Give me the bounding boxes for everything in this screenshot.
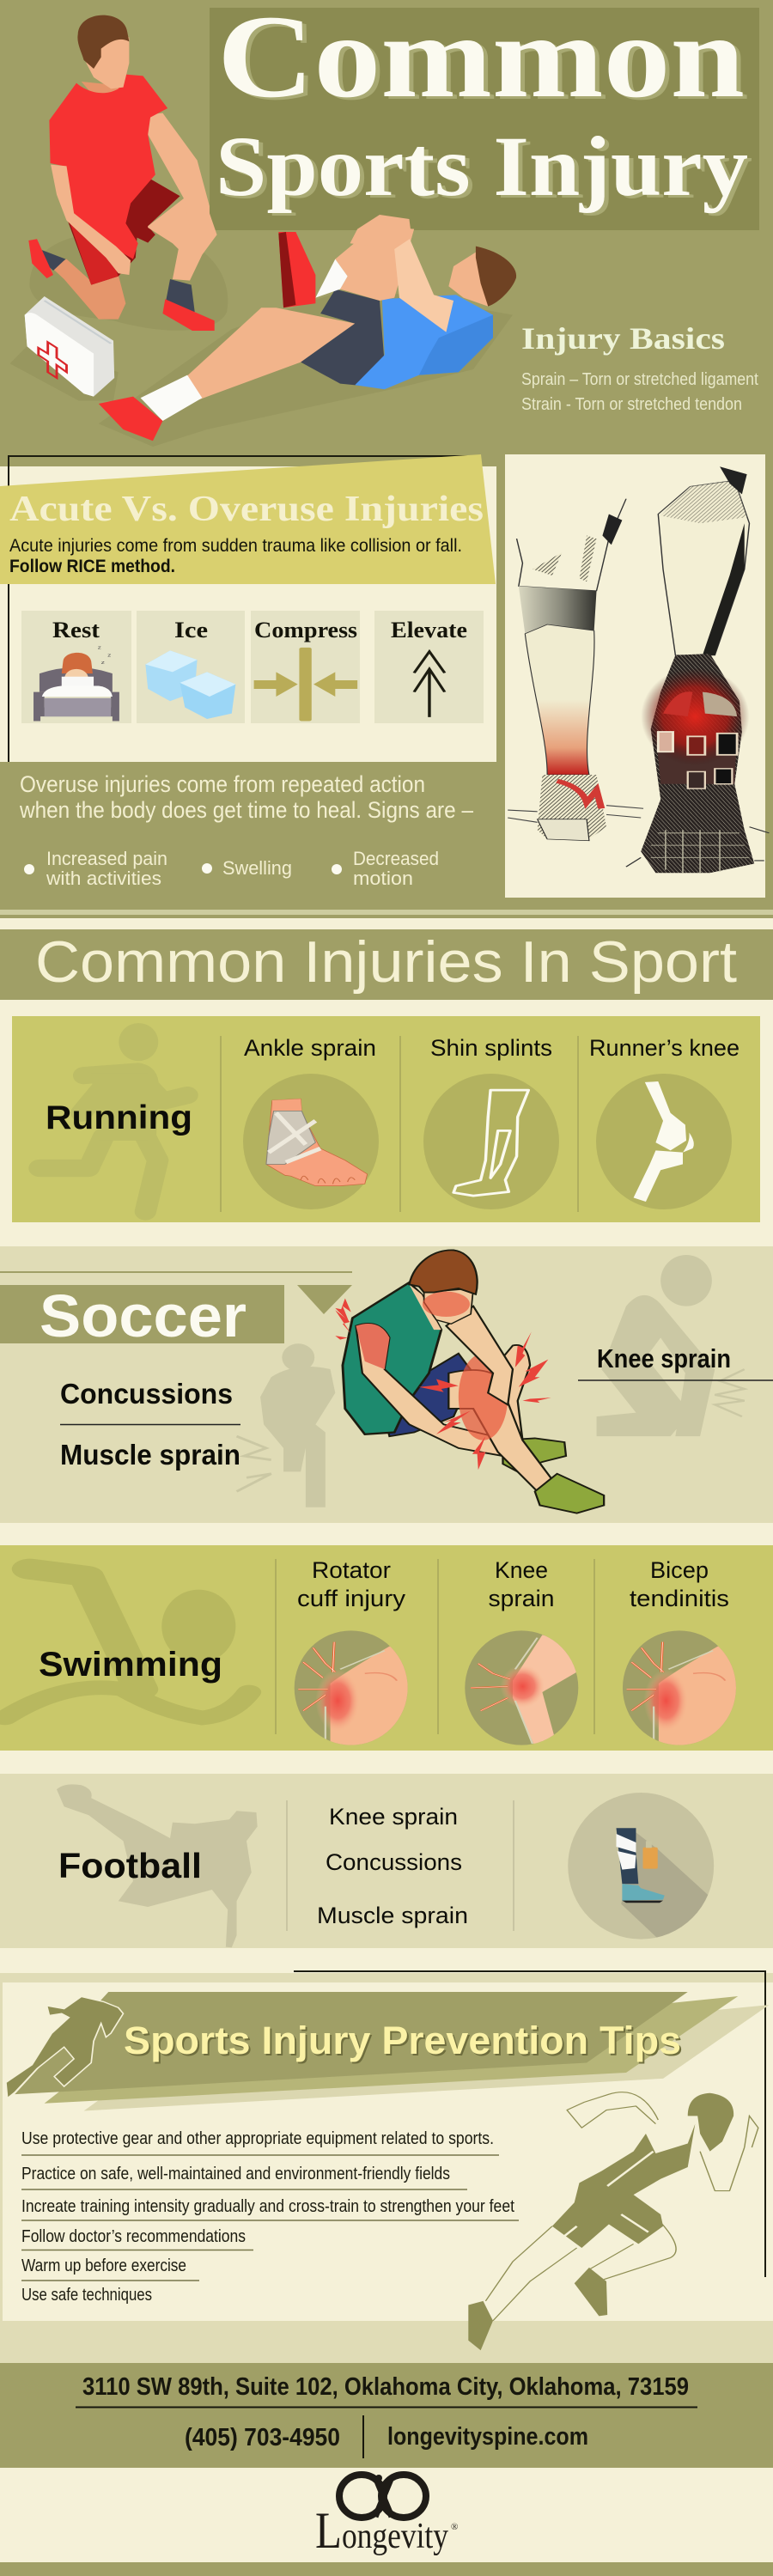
text: Knee sprain: Knee sprain [597, 1343, 731, 1373]
list: prevention tips [21, 2129, 519, 2305]
panel: running [12, 1016, 760, 1222]
text: acute description: Acute injuries come from sudden trauma like collision or fall. [9, 536, 462, 556]
icon: first aid kit [25, 296, 114, 397]
icon: bandaged leg medallion [568, 1793, 715, 1941]
panel: heading band common injuries: Common Injuries In Sport [35, 929, 737, 995]
column: knee sprain: Knee [495, 1557, 548, 1583]
panel: football [0, 1774, 773, 1948]
banner: prevention tips ribbon [6, 1992, 769, 2110]
banner: Soccer [0, 1282, 352, 1349]
list: prevention tips: Use protective gear and other appropriate equipment related to sports. [21, 2129, 494, 2148]
column: ankle sprain [243, 1035, 379, 1209]
text: phone: (405) 703-4950 [185, 2424, 340, 2451]
panel: prevention tips [0, 1971, 773, 2363]
label: Football: Football [58, 1846, 202, 1885]
logo: Longevity: Longevity [315, 2502, 448, 2559]
icon: ghost swimmer [5, 1569, 249, 1718]
card: elevate [374, 611, 484, 723]
list: football injuries: Muscle sprain [317, 1903, 468, 1928]
column: shin splints [423, 1035, 559, 1209]
column: bicep tendinitis: tendinitis [630, 1586, 729, 1611]
panel: soccer [0, 1246, 773, 1523]
list: prevention tips: Warm up before exercise [21, 2256, 186, 2275]
panel: contact details [0, 2363, 773, 2468]
heading: Injury Basics: Injury Basics [521, 321, 725, 356]
icon: kneeling physio [28, 15, 217, 331]
column: ankle sprain: Ankle sprain [244, 1035, 376, 1061]
list: prevention tips: Use safe techniques [21, 2286, 152, 2305]
column: runners knee [589, 1035, 740, 1209]
card: rest: z [107, 653, 112, 658]
illustration: injured soccer player [335, 1250, 604, 1513]
list: football injuries: Concussions [326, 1849, 462, 1875]
column: rotator cuff injury: Rotator [312, 1557, 391, 1583]
column: bicep tendinitis [623, 1562, 736, 1745]
footer band [0, 2562, 773, 2576]
logo: Longevity [315, 2475, 458, 2559]
text: strain definition: Strain - Torn or stretched tendon [521, 395, 742, 414]
list: overuse signs: Increased pain [46, 848, 167, 869]
text: address: 3110 SW 89th, Suite 102, Oklahoma City, Oklahoma, 73159 [82, 2373, 689, 2401]
column: shin splints: Shin splints [430, 1035, 552, 1061]
card: rest: Rest [52, 618, 100, 642]
panel: acute injuries [0, 454, 496, 762]
card: rest: z [101, 660, 105, 665]
icon: lying athlete [99, 215, 516, 441]
list: overuse signs [24, 848, 439, 889]
panel: title block [210, 0, 759, 230]
card: compress: Compress [254, 618, 357, 642]
text: Muscle sprain: Muscle sprain [60, 1439, 240, 1471]
list: football injuries: Knee sprain [329, 1804, 458, 1830]
list: overuse signs: with activities [46, 868, 161, 889]
column: knee sprain [464, 1557, 581, 1746]
column: runners knee: Runner’s knee [589, 1035, 740, 1061]
illustration: right leg sketch [626, 466, 769, 873]
list: overuse signs: Decreased [353, 848, 439, 869]
card: compress [251, 611, 360, 723]
list: prevention tips: Increate training intensity gradually and cross-train to strengthen your feet [21, 2197, 514, 2216]
illustration: physio and injured athlete [9, 15, 516, 447]
list: overuse signs: motion [353, 868, 413, 889]
list: prevention tips: Follow doctor’s recommendations [21, 2227, 246, 2246]
banner: Soccer: Soccer [40, 1282, 247, 1349]
text: Concussions: Concussions [60, 1378, 233, 1410]
list: football injuries [317, 1804, 468, 1928]
label: Swimming: Swimming [39, 1646, 222, 1684]
illustration: left leg sketch [508, 499, 643, 841]
column: knee sprain: sprain [488, 1586, 555, 1611]
icon: ghost runner [40, 1023, 187, 1211]
heading: Sports Injury Prevention Tips: Sports Injury Prevention Tips [124, 2019, 681, 2062]
text: follow RICE: Follow RICE method. [9, 557, 175, 576]
label: Running: Running [46, 1099, 192, 1136]
heading: Acute Vs. Overuse Injuries: Acute Vs. Overuse Injuries [9, 490, 484, 529]
text: overuse description: when the body does get time to heal. Signs are – [19, 797, 473, 823]
panel: header and acute section olive background [0, 0, 773, 910]
panel: leg sketch [505, 454, 769, 898]
icon: ghost football player [57, 1784, 258, 1947]
card: ice [137, 611, 245, 723]
column: rotator cuff injury: cuff injury [297, 1586, 406, 1611]
list: prevention tips: Practice on safe, well-maintained and environment-friendly fields [21, 2165, 450, 2183]
column: bicep tendinitis: Bicep [650, 1557, 709, 1583]
column: rotator cuff injury [294, 1562, 408, 1745]
text: overuse description [19, 771, 473, 823]
card: ice: Ice [174, 618, 208, 642]
illustration: sprinter [468, 2092, 758, 2350]
card: rest [21, 611, 131, 723]
icon: small sprinter [6, 1996, 123, 2098]
text: website: longevityspine.com [387, 2423, 588, 2451]
list: overuse signs: Swelling [222, 857, 292, 879]
title: Sports Injury: Sports Injury [216, 119, 748, 214]
logo: Longevity: ® [451, 2522, 458, 2532]
icon: ghost figures [237, 1255, 745, 1507]
text: overuse description: Overuse injuries come from repeated action [20, 771, 425, 797]
card: rest: z [98, 645, 101, 650]
card: elevate: Elevate [391, 618, 467, 642]
panel: swimming [0, 1545, 773, 1751]
